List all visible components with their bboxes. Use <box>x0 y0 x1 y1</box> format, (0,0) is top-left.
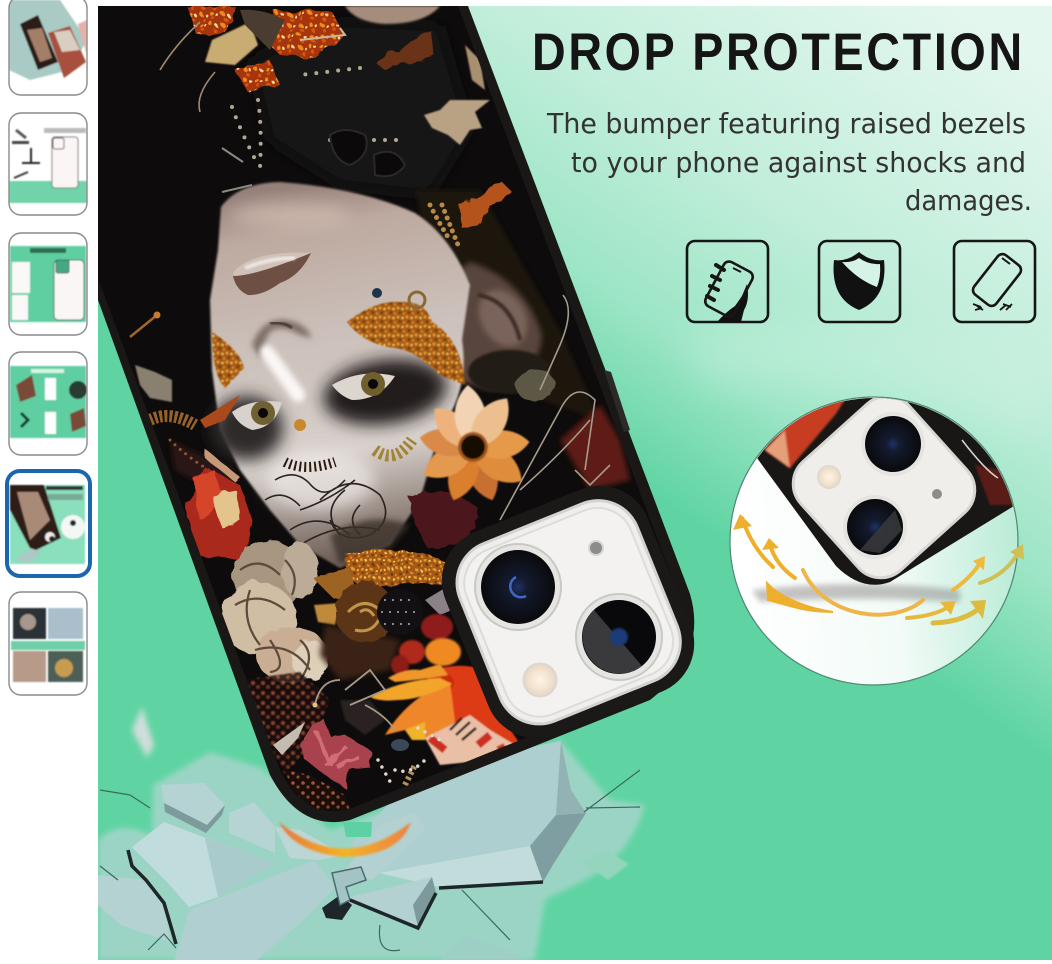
gold rose cluster <box>313 549 447 680</box>
left eye <box>232 401 282 430</box>
left slab <box>148 824 264 859</box>
ear <box>461 260 544 393</box>
right slab <box>350 741 562 873</box>
thumbnail 5: selected drop protection <box>7 471 90 576</box>
green gap <box>343 822 372 837</box>
lower left slab <box>175 860 336 960</box>
lower left dark texture <box>240 670 395 810</box>
red flower <box>185 447 252 560</box>
dark pit <box>322 895 352 920</box>
face <box>210 182 470 568</box>
printed artwork <box>98 6 670 811</box>
flash <box>523 663 557 697</box>
rubble: cracked ground <box>98 707 645 960</box>
peach peony <box>220 541 328 683</box>
thumbnail 6: multi-scene usage <box>9 592 87 695</box>
far left block <box>98 875 170 942</box>
berries <box>391 614 461 675</box>
camera plate <box>781 384 987 590</box>
lily <box>370 664 525 765</box>
icon: hand holding phone <box>687 241 768 322</box>
upper left block <box>161 783 225 825</box>
lace lines <box>265 475 386 545</box>
impact arrows <box>733 514 1024 623</box>
description text <box>546 107 1032 217</box>
scarf folds <box>258 28 456 188</box>
right eye smoke <box>319 352 451 432</box>
right eye <box>332 373 395 400</box>
lens bottom <box>576 594 662 680</box>
orange flower <box>417 384 531 505</box>
case body <box>98 6 694 822</box>
thumbnail 1: two phone cases <box>9 0 87 95</box>
icon: shield <box>819 241 900 322</box>
shadow under case <box>752 584 960 602</box>
beads <box>378 728 440 785</box>
gem clusters <box>285 462 335 467</box>
artwork flowers <box>765 392 850 468</box>
lower right slab <box>350 877 436 927</box>
gold butterfly <box>160 6 435 112</box>
microphone <box>932 489 942 499</box>
leaves and wires right of flower <box>410 295 630 550</box>
heading: DROP PROTECTION <box>532 22 1022 82</box>
case corner <box>720 380 1040 585</box>
icon: dropping phone <box>954 241 1035 322</box>
flash <box>817 465 841 489</box>
blackberry <box>377 588 452 635</box>
left eye smoke <box>211 396 283 460</box>
pink coral flower <box>300 717 372 788</box>
thumbnail 4: how to use <box>9 352 87 455</box>
falling shard <box>132 707 154 758</box>
knot stone <box>332 867 366 905</box>
description text: The bumper featuring raised bezels <box>546 107 1026 140</box>
lens top <box>861 412 925 476</box>
middle block <box>229 802 275 853</box>
lens bottom <box>843 495 907 559</box>
lips <box>233 252 310 276</box>
description text: damages. <box>905 184 1032 217</box>
lens top <box>475 544 561 630</box>
microphone <box>589 541 603 555</box>
description text: to your phone against shocks and <box>571 146 1026 179</box>
phone case <box>98 6 718 836</box>
camera module <box>426 470 710 754</box>
neck skin at top <box>345 6 440 24</box>
detail circle: raised camera bezel <box>720 380 1040 685</box>
side buttons <box>604 370 630 432</box>
right hair shadow <box>415 190 600 420</box>
bead strings and leaves <box>222 45 512 250</box>
camera bump bezel <box>426 470 710 754</box>
glitter gold <box>347 302 465 385</box>
rubble halo <box>98 740 645 960</box>
jewel <box>372 288 382 298</box>
thumbnail 2: case features <box>9 113 87 215</box>
distant stones <box>587 852 629 880</box>
centre stones <box>275 827 345 860</box>
thumbnail 3: feature sheet <box>9 233 87 335</box>
thumbnail rail <box>7 0 90 695</box>
cream sprig <box>273 722 305 755</box>
left sprigs <box>130 312 240 500</box>
camera plate <box>444 488 693 737</box>
impact glow <box>279 822 411 857</box>
cracks <box>128 850 543 944</box>
nose <box>252 320 312 360</box>
